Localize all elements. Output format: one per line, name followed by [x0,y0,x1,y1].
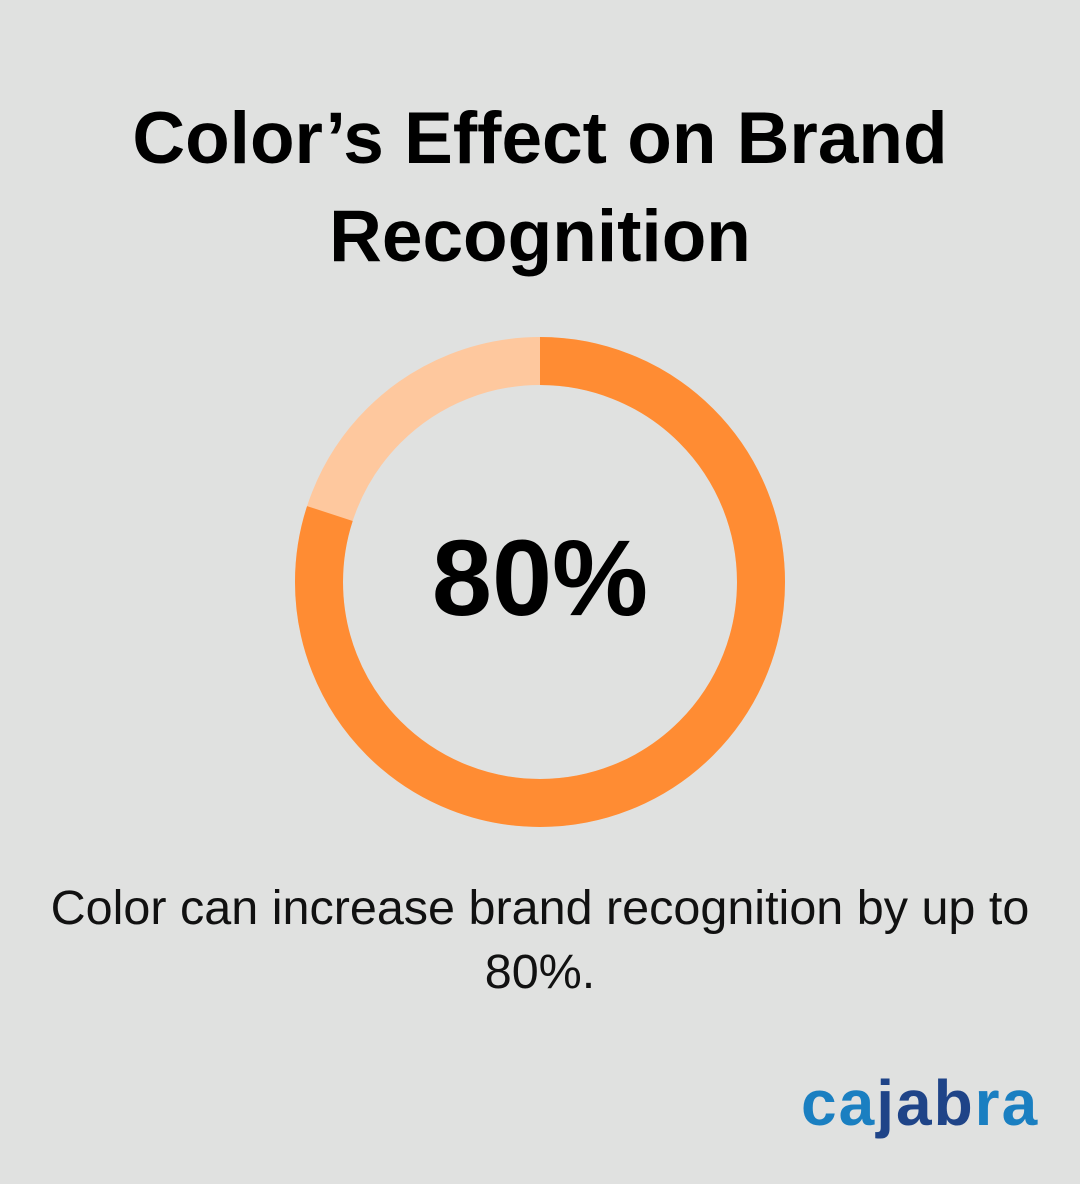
logo: cajabra [801,1067,1039,1139]
description text: 80%. [485,945,595,999]
description text: Color can increase brand recognition by up to [51,881,1029,935]
description text [51,881,1029,999]
light segment 20% [319,361,761,803]
title: Recognition [329,196,751,277]
orange segment 80% [319,361,761,803]
percentage label: 80% [432,517,648,638]
title: Color’s Effect on Brand [132,98,948,179]
title [132,98,948,277]
